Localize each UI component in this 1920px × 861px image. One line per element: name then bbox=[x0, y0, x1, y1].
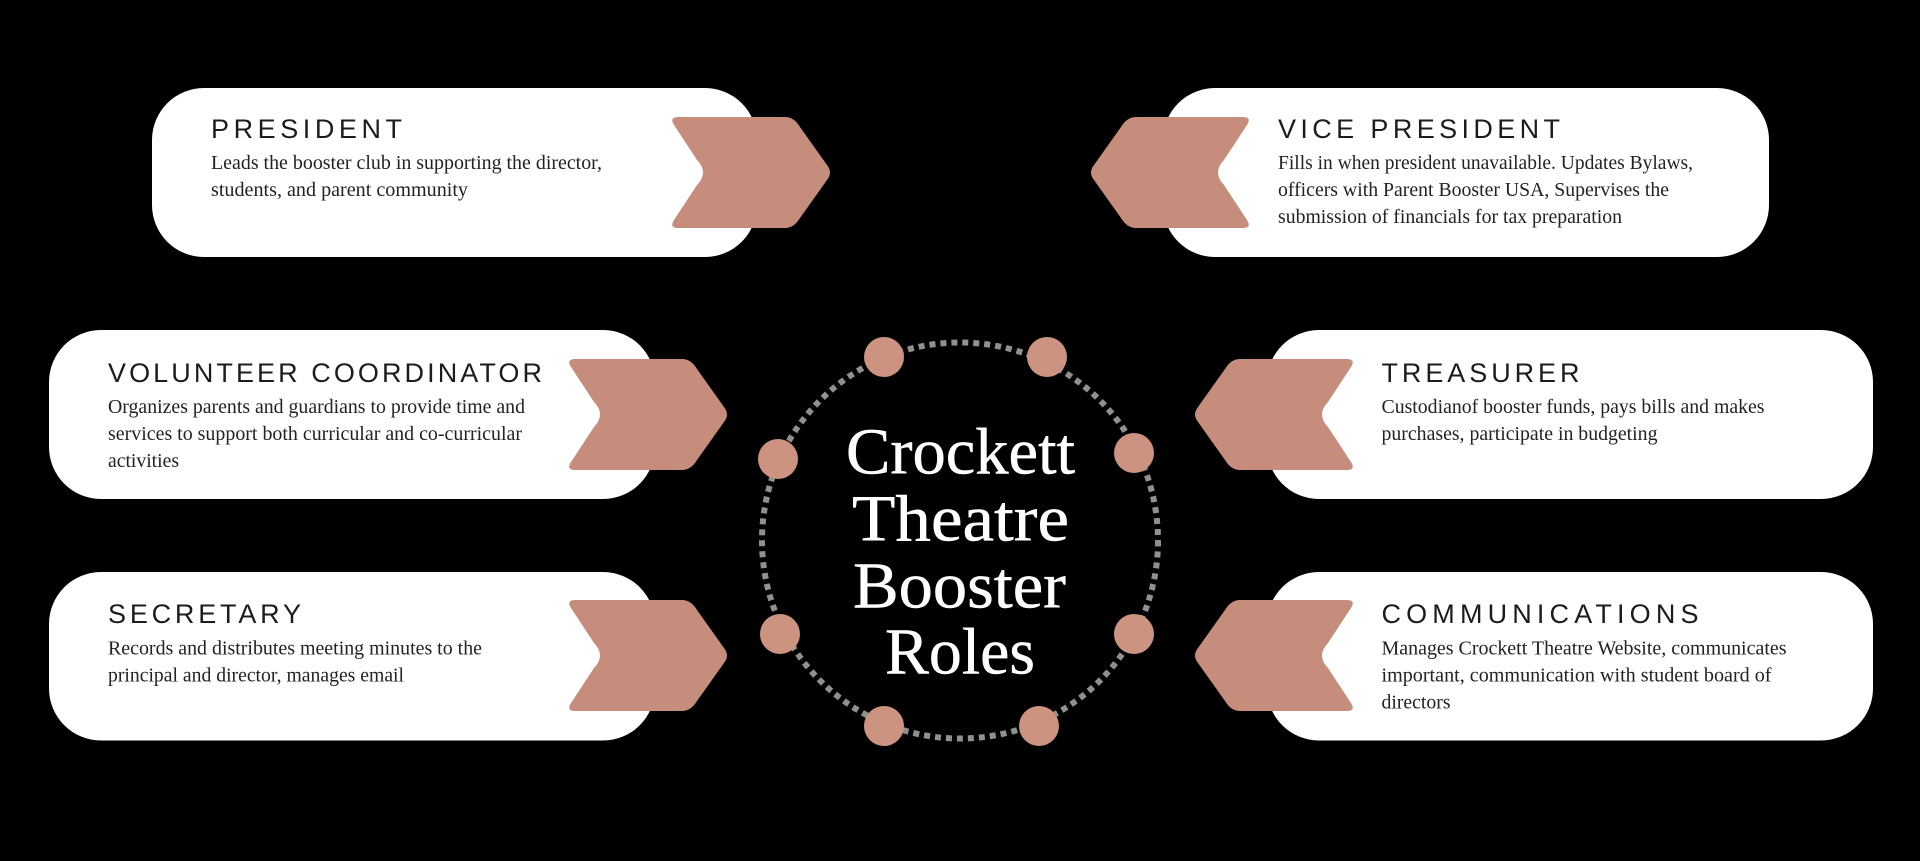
text: secretary description: Records and distributes meeting minutes to the bbox=[108, 638, 482, 660]
panel: volunteer coordinator bbox=[49, 330, 727, 499]
text: volunteer coordinator description: Organizes parents and guardians to provide time and bbox=[108, 397, 525, 418]
text: treasurer description: purchases, participate in budgeting bbox=[1382, 424, 1658, 445]
text: communications description: important, communication with student board of bbox=[1382, 666, 1772, 686]
text: secretary description: principal and director, manages email bbox=[108, 666, 405, 686]
text: president description bbox=[211, 153, 602, 201]
text: president description: students, and parent community bbox=[211, 180, 468, 201]
arrow: treasurer bbox=[1195, 359, 1353, 470]
arrow: vice president bbox=[1091, 117, 1249, 228]
text: vice president description: officers with Parent Booster USA, Supervises the bbox=[1278, 180, 1669, 201]
panel: secretary bbox=[49, 572, 727, 740]
title: Booster bbox=[853, 550, 1066, 622]
heading: treasurer: TREASURER bbox=[1382, 358, 1580, 388]
text: volunteer coordinator description: services to support both curricular and co-curricular bbox=[108, 424, 523, 445]
title: Crockett bbox=[846, 416, 1075, 488]
title: Roles bbox=[885, 616, 1035, 688]
arrow: volunteer coordinator bbox=[569, 359, 727, 470]
panel: treasurer bbox=[1195, 330, 1873, 499]
text: volunteer coordinator description: activities bbox=[108, 451, 179, 472]
heading: communications: COMMUNICATIONS bbox=[1382, 599, 1698, 629]
heading: vice president: VICE PRESIDENT bbox=[1278, 114, 1560, 144]
arrow: secretary bbox=[569, 600, 727, 711]
arrow: president bbox=[672, 117, 830, 228]
text: president description: Leads the booster club in supporting the director, bbox=[211, 153, 602, 174]
text: treasurer description bbox=[1382, 397, 1764, 445]
text: communications description: directors bbox=[1382, 692, 1450, 714]
text: treasurer description: Custodianof booster funds, pays bills and makes bbox=[1382, 397, 1764, 418]
text: vice president description: Fills in when president unavailable. Updates Bylaws, bbox=[1278, 153, 1693, 174]
text: vice president description: submission of financials for tax preparation bbox=[1278, 207, 1622, 228]
text: volunteer coordinator description bbox=[108, 397, 525, 472]
title: Theatre bbox=[852, 482, 1069, 556]
panel: president bbox=[152, 88, 830, 257]
heading: president: PRESIDENT bbox=[211, 114, 402, 144]
heading: volunteer coordinator: VOLUNTEER COORDINATOR bbox=[108, 358, 542, 388]
text: communications description: Manages Crockett Theatre Website, communicates bbox=[1382, 638, 1786, 660]
title bbox=[846, 416, 1075, 688]
text: secretary description bbox=[108, 638, 482, 686]
panel: communications bbox=[1195, 572, 1873, 740]
panel: vice president bbox=[1091, 88, 1769, 257]
text: vice president description bbox=[1278, 153, 1693, 228]
arrow: communications bbox=[1195, 600, 1353, 711]
text: communications description bbox=[1382, 638, 1786, 714]
heading: secretary: SECRETARY bbox=[108, 599, 301, 629]
central dotted ring with nodes bbox=[758, 337, 1158, 746]
